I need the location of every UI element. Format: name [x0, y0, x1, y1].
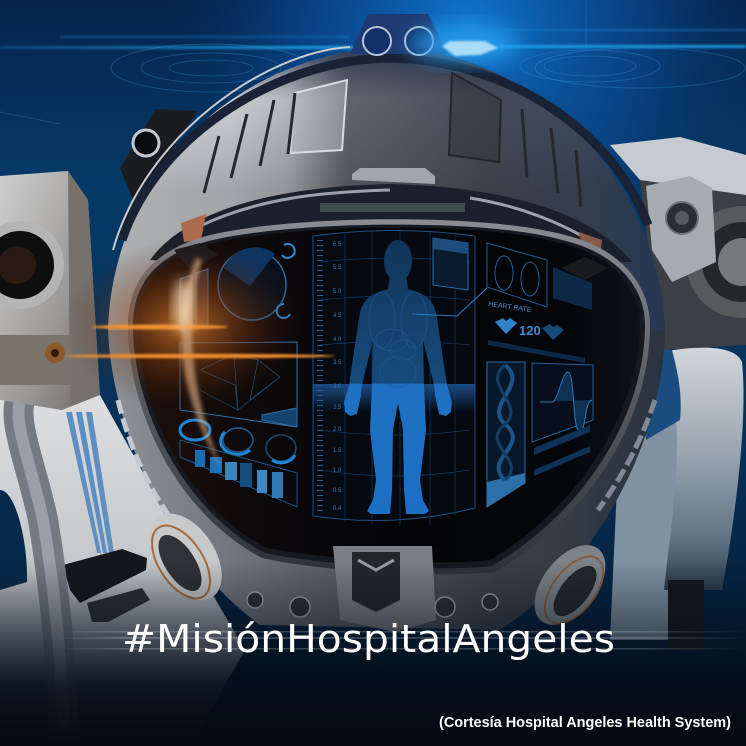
photo credit: (Cortesía Hospital Angeles Health System) — [439, 715, 731, 731]
right mechanical joint — [646, 176, 746, 318]
helmet: dome panels and slits — [204, 73, 581, 207]
helmet — [108, 14, 665, 638]
chest plate — [63, 549, 147, 603]
title hashtag: #MisiónHospitalAngeles — [122, 617, 615, 662]
bottom dark fade over suit — [0, 560, 746, 746]
hud: network chart panel — [180, 342, 297, 427]
helmet side camera — [120, 109, 197, 207]
hud: rings — [180, 420, 296, 463]
hud: human body figure — [344, 240, 452, 514]
flare: lower streak — [65, 354, 335, 358]
hud: small left columns — [180, 269, 208, 330]
hud: document panel — [433, 238, 468, 290]
hud: ruler numbers: 2.0 — [333, 427, 342, 433]
helmet: band slot — [320, 203, 465, 212]
hud: ruler numbers: 6.5 — [333, 242, 342, 248]
visor — [138, 228, 640, 562]
flare: orange glow — [65, 240, 305, 410]
hud: lungs panel — [487, 243, 547, 307]
hud: ruler numbers: 5.5 — [333, 265, 342, 271]
hud: ruler numbers: 3.0 — [333, 384, 342, 390]
helmet: visor clips — [174, 243, 608, 280]
hud: ruler numbers: 0.5 — [333, 488, 342, 494]
hud: ruler numbers: 1.0 — [333, 468, 342, 474]
right arm of suit — [610, 345, 744, 650]
flare: crescent — [181, 258, 222, 470]
hud: DNA panel — [487, 362, 525, 507]
hud: heads-up display inside visor — [180, 229, 593, 526]
blue top flare — [410, 26, 520, 62]
helmet: left nozzle — [136, 501, 236, 613]
helmet: rail highlight — [113, 47, 350, 250]
hud: ruler numbers: 4.5 — [333, 313, 342, 319]
lower chest plate — [87, 588, 150, 622]
helmet: band highlights — [200, 190, 600, 246]
hud: ruler numbers: 1.5 — [333, 448, 342, 454]
helmet: top camera mount — [350, 14, 448, 55]
lens flare — [65, 240, 335, 470]
hud: body organs — [369, 292, 427, 387]
helmet: lower mechanical collar — [108, 320, 665, 630]
helmet: rim inner dark line — [133, 225, 645, 568]
hud: side readouts — [488, 267, 592, 363]
helmet: chin unit — [333, 546, 436, 632]
hud: secondary heart icon — [542, 324, 564, 340]
hud: connector line — [412, 288, 487, 316]
hud: centre grid panel — [313, 229, 475, 526]
left suit body — [0, 395, 245, 746]
hud: ruler numbers: 5.0 — [333, 289, 342, 295]
helmet: right rim segments — [598, 400, 655, 510]
helmet: mechanical fittings — [247, 592, 498, 617]
helmet: dome — [108, 47, 665, 330]
flare: hot core — [174, 279, 192, 331]
helmet: right nozzle — [520, 532, 620, 638]
air hose — [18, 398, 65, 746]
helmet: copper patches — [181, 214, 602, 256]
helmet: silver tab — [352, 168, 435, 184]
horizontal light streak behind title — [60, 631, 746, 650]
left camera box — [0, 171, 100, 410]
hud: radar — [218, 244, 295, 320]
flare: upper streak — [92, 324, 228, 330]
helmet: silver rim — [128, 219, 650, 574]
hud: bar chart — [180, 440, 297, 507]
hud: ruler numbers: 2.5 — [333, 405, 342, 411]
hud: ruler numbers: 4.0 — [333, 337, 342, 343]
hud: wave panel — [532, 363, 593, 476]
helmet: band above visor — [150, 184, 632, 262]
helmet: dome shading — [108, 47, 665, 330]
right shoulder of suit — [610, 137, 746, 350]
helmet: left rim segments — [118, 400, 172, 520]
hud: heart rate value: 120 — [519, 323, 541, 338]
horizontal blue light streaks — [0, 29, 746, 49]
hud: ruler numbers: 3.5 — [333, 360, 342, 366]
hud: ruler numbers: 0.4 — [333, 506, 342, 512]
hud: heart rate label: HEART RATE — [488, 301, 532, 314]
hud: ruler numbers — [333, 242, 342, 512]
hud: heart icon — [495, 318, 517, 334]
helmet: dome top rail — [122, 58, 648, 240]
